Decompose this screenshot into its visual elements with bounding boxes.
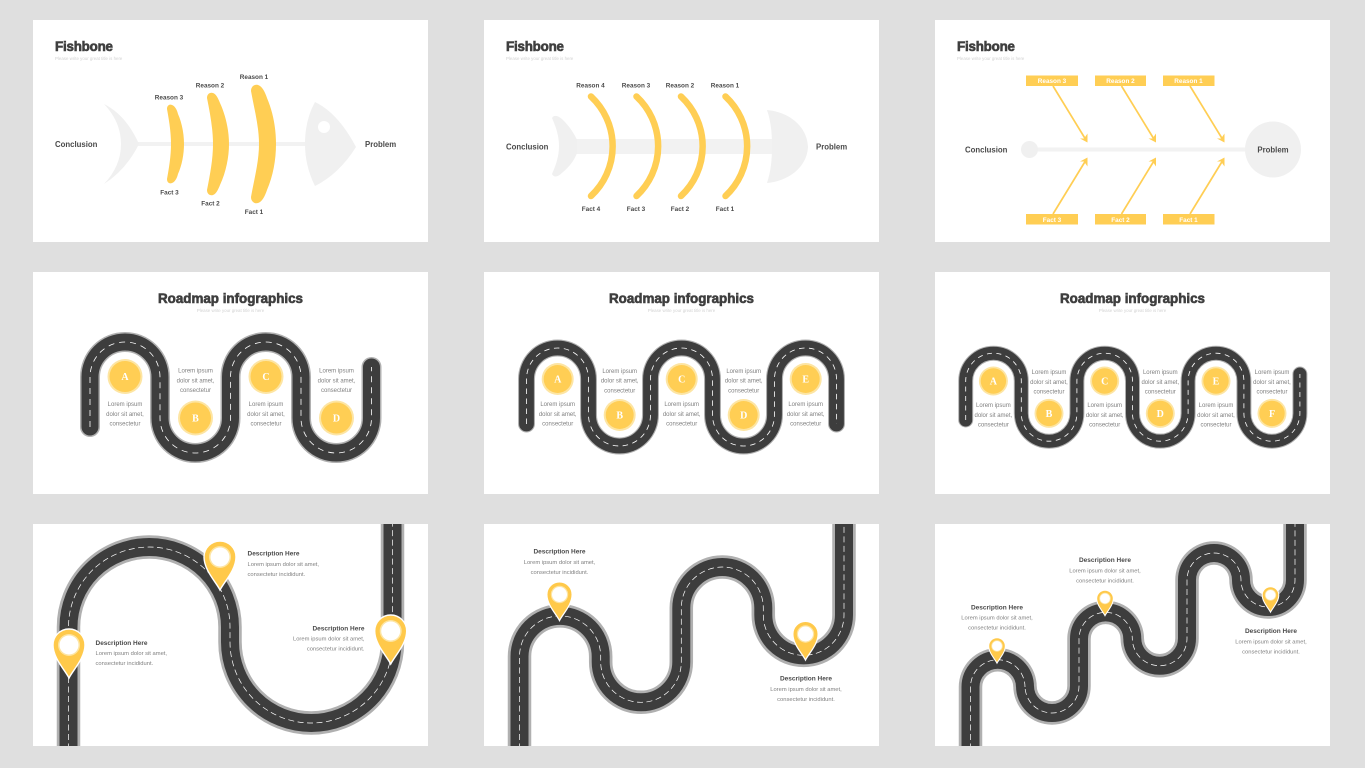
label: Reason 2: Reason 2 — [666, 82, 695, 90]
description 2: consectetur incididunt. — [1076, 578, 1134, 584]
fish head — [305, 102, 356, 186]
bone 3 — [167, 105, 184, 183]
description 3: Lorem ipsum dolor sit amet, — [1235, 639, 1307, 645]
text A: dolor sit amet, — [539, 412, 577, 418]
text B: dolor sit amet, — [601, 379, 639, 385]
description 3: consectetur incididunt. — [307, 646, 365, 652]
label box: Reason 3: Reason 3 — [1038, 78, 1067, 85]
text C: Lorem ipsum — [1087, 403, 1122, 409]
marker B — [1034, 399, 1064, 428]
description 2: Lorem ipsum dolor sit amet, — [1069, 568, 1141, 574]
label: Reason 2: Reason 2 — [196, 82, 225, 90]
pin 1 — [53, 629, 85, 678]
panel: roadmap A to D — [33, 272, 428, 494]
marker B: B — [616, 410, 623, 422]
text E: Lorem ipsum — [1199, 403, 1233, 409]
text B: Lorem ipsum — [1032, 370, 1066, 376]
text A: dolor sit amet, — [106, 412, 144, 418]
description 3 — [1235, 628, 1307, 655]
winding road — [966, 353, 1300, 441]
text D: dolor sit amet, — [725, 379, 763, 385]
description 2: Description Here — [248, 550, 300, 558]
marker E — [1202, 366, 1230, 396]
text B: Lorem ipsum — [178, 368, 213, 374]
description 1: Lorem ipsum dolor sit amet, — [96, 651, 167, 657]
head circle — [1245, 122, 1301, 178]
text A: dolor sit amet, — [975, 413, 1013, 419]
text D: consectetur — [321, 388, 352, 394]
text D: Lorem ipsum — [726, 369, 761, 375]
description 1: consectetur incididunt. — [968, 626, 1026, 632]
road — [970, 509, 1295, 759]
label: Problem: Problem — [1257, 146, 1289, 154]
description 3 — [293, 626, 365, 652]
marker E: E — [802, 374, 809, 386]
description 2: Lorem ipsum dolor sit amet, — [248, 562, 319, 568]
description 1 — [961, 604, 1033, 632]
panel: road with three large pins — [33, 524, 428, 746]
description 3: consectetur incididunt. — [1242, 649, 1300, 655]
marker D: D — [740, 410, 747, 422]
marker A: A — [121, 372, 129, 383]
text A: Lorem ipsum — [976, 403, 1011, 409]
panel: fishbone with arc bones — [484, 20, 879, 242]
marker A: A — [990, 376, 998, 388]
description 2: Description Here — [1079, 557, 1131, 564]
description 1 — [96, 640, 167, 667]
bone 1 — [251, 85, 276, 203]
label box: Reason 2: Reason 2 — [1106, 78, 1135, 85]
text D: dolor sit amet, — [318, 378, 356, 384]
road — [68, 509, 392, 759]
marker D: D — [1157, 409, 1164, 420]
subtitle: Please write your great title is here — [648, 308, 716, 313]
label: Reason 1: Reason 1 — [711, 82, 740, 90]
text B: dolor sit amet, — [177, 378, 215, 384]
label: Fact 1: Fact 1 — [245, 209, 264, 216]
marker F — [1258, 399, 1286, 428]
label box: Fact 3: Fact 3 — [1043, 217, 1062, 224]
label: Conclusion: Conclusion — [506, 142, 549, 152]
text E: consectetur — [790, 422, 821, 428]
text C: Lorem ipsum — [664, 402, 699, 408]
description 2: consectetur incididunt. — [248, 572, 306, 578]
pin 1 — [547, 582, 572, 621]
marker C: C — [262, 372, 270, 383]
description 1: Description Here — [96, 640, 148, 647]
marker B: B — [1046, 409, 1053, 420]
text A: consectetur — [978, 422, 1009, 428]
road — [520, 509, 844, 759]
fish spine — [574, 139, 776, 154]
text C: consectetur — [250, 422, 282, 428]
heading: Fishbone: Fishbone — [506, 39, 564, 54]
subtitle: Please write your great title is here — [197, 308, 265, 313]
text F: dolor sit amet, — [1253, 380, 1291, 386]
text C: consectetur — [1089, 422, 1120, 428]
text A: Lorem ipsum — [108, 402, 142, 408]
description 2: Description Here — [780, 676, 832, 682]
winding road — [526, 348, 836, 446]
marker C — [1090, 366, 1119, 396]
text E: Lorem ipsum — [788, 402, 823, 408]
marker E — [790, 363, 822, 395]
text C: consectetur — [666, 422, 697, 428]
text E: dolor sit amet, — [787, 412, 825, 418]
label: Fact 1: Fact 1 — [716, 206, 735, 213]
bone 2 — [207, 93, 229, 195]
label: Problem: Problem — [816, 142, 847, 152]
description 2 — [1069, 557, 1141, 584]
label: Fact 4: Fact 4 — [582, 206, 601, 213]
marker C — [248, 359, 284, 394]
description 2 — [248, 550, 319, 578]
description 3: Lorem ipsum dolor sit amet, — [293, 636, 365, 642]
label box: Reason 1: Reason 1 — [1174, 78, 1203, 85]
label: Problem: Problem — [365, 140, 396, 149]
fish tail — [552, 116, 577, 176]
label: Reason 4: Reason 4 — [576, 82, 605, 90]
marker C: C — [1101, 376, 1108, 388]
marker A — [108, 359, 142, 394]
winding road — [90, 342, 372, 453]
label: Fact 3: Fact 3 — [160, 190, 179, 196]
label: Fact 2: Fact 2 — [201, 200, 220, 208]
pin 2 — [793, 621, 818, 660]
label box: Fact 1: Fact 1 — [1179, 217, 1198, 224]
text C: dolor sit amet, — [1086, 413, 1124, 419]
text E: consectetur — [1200, 422, 1232, 428]
text A: Lorem ipsum — [540, 402, 575, 408]
marker D: D — [333, 414, 340, 424]
fish spine — [137, 142, 307, 146]
marker D — [1146, 399, 1175, 428]
panel: roadmap A to F — [935, 272, 1330, 494]
label box: Reason 3 — [1026, 76, 1078, 86]
marker B — [604, 399, 636, 431]
description 1: Lorem ipsum dolor sit amet, — [524, 560, 596, 566]
text C: Lorem ipsum — [249, 402, 283, 408]
subtitle: Please write your great title is here — [506, 56, 574, 61]
text D: consectetur — [1145, 390, 1176, 396]
arrows — [1053, 86, 1224, 214]
text F: consectetur — [1256, 390, 1288, 396]
text B: consectetur — [180, 388, 211, 394]
description 2: Lorem ipsum dolor sit amet, — [770, 687, 842, 693]
text C: dolor sit amet, — [663, 412, 701, 418]
text D: Lorem ipsum — [1143, 370, 1178, 376]
fish head — [767, 110, 808, 183]
description 2 — [770, 676, 842, 703]
label: Reason 1: Reason 1 — [240, 74, 269, 81]
text A: consectetur — [109, 422, 141, 428]
panel: fishbone with crescent bones — [33, 20, 428, 242]
description 1: Description Here — [971, 604, 1023, 612]
marker C: C — [678, 374, 685, 386]
text B: consectetur — [604, 388, 635, 394]
marker D — [319, 400, 354, 436]
label box: Fact 3 — [1026, 214, 1078, 224]
description 2: consectetur incididunt. — [777, 697, 835, 703]
text D: consectetur — [728, 388, 759, 394]
marker F: F — [1269, 409, 1275, 420]
heading: Fishbone: Fishbone — [957, 39, 1015, 54]
text B: consectetur — [1033, 390, 1065, 396]
marker C — [666, 363, 698, 395]
fish tail — [104, 104, 139, 184]
label box: Fact 1 — [1163, 214, 1214, 224]
spine — [1033, 148, 1249, 152]
label: Fact 3: Fact 3 — [627, 206, 646, 213]
subtitle: Please write your great title is here — [957, 56, 1025, 61]
pin 2 — [1097, 590, 1113, 616]
label: Conclusion: Conclusion — [965, 146, 1008, 154]
text D: dolor sit amet, — [1141, 380, 1179, 386]
marker A — [542, 363, 574, 395]
label box: Fact 2 — [1095, 214, 1146, 224]
label box: Fact 2: Fact 2 — [1111, 217, 1130, 224]
text D: Lorem ipsum — [319, 368, 354, 374]
label: Reason 3: Reason 3 — [622, 82, 651, 90]
description 1: Description Here — [533, 548, 586, 556]
description 1 — [524, 548, 596, 576]
marker D — [728, 399, 760, 431]
heading: Roadmap infographics: Roadmap infographics — [158, 291, 303, 306]
subtitle: Please write your great title is here — [55, 56, 123, 61]
heading: Roadmap infographics: Roadmap infographics — [1060, 291, 1205, 306]
marker B — [178, 400, 213, 436]
marker A: A — [554, 374, 562, 386]
tail circle — [1021, 141, 1038, 158]
pin 2 — [204, 541, 236, 590]
pin 1 — [989, 638, 1005, 663]
panel: road with two pins — [484, 524, 879, 746]
heading: Fishbone: Fishbone — [55, 39, 113, 54]
text E: dolor sit amet, — [1197, 413, 1235, 419]
label box: Reason 2 — [1095, 76, 1146, 86]
label: Conclusion: Conclusion — [55, 140, 98, 149]
arc bones — [591, 96, 747, 196]
label: Fact 2: Fact 2 — [671, 206, 690, 213]
panel: fishbone with arrows — [935, 20, 1330, 242]
marker E: E — [1213, 376, 1220, 388]
pin 3 — [375, 615, 407, 664]
label: Reason 3: Reason 3 — [155, 94, 184, 102]
description 3: Description Here — [312, 626, 365, 632]
description 1: Lorem ipsum dolor sit amet, — [961, 616, 1033, 622]
marker A — [979, 366, 1008, 396]
panel: roadmap A to E — [484, 272, 879, 494]
panel: road with three small pins — [935, 524, 1330, 746]
text A: consectetur — [542, 422, 573, 428]
heading: Roadmap infographics: Roadmap infographics — [609, 291, 754, 306]
subtitle: Please write your great title is here — [1099, 308, 1167, 313]
text B: Lorem ipsum — [602, 369, 637, 375]
text F: Lorem ipsum — [1255, 370, 1289, 376]
text B: dolor sit amet, — [1030, 380, 1068, 386]
description 1: consectetur incididunt. — [531, 570, 589, 576]
description 1: consectetur incididunt. — [96, 661, 154, 667]
marker B: B — [192, 414, 199, 424]
label box: Reason 1 — [1163, 76, 1214, 86]
pin 3 — [1262, 587, 1279, 612]
description 3: Description Here — [1245, 628, 1297, 635]
fish eye — [318, 121, 330, 133]
text C: dolor sit amet, — [247, 412, 285, 418]
